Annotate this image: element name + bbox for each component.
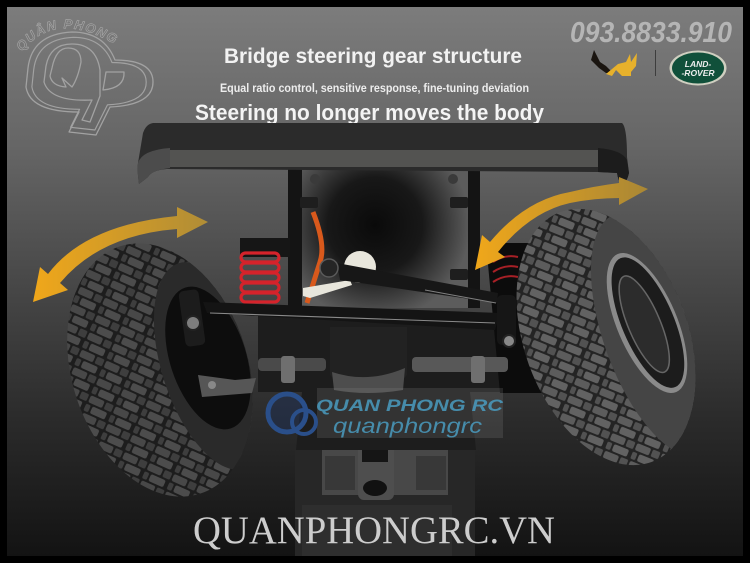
- white servo horn: [303, 251, 376, 298]
- right tire: [516, 209, 696, 466]
- watermark: Quan Phong RC: [268, 388, 504, 438]
- divider between brand logos: [655, 50, 656, 76]
- arrow: right wheel turn: [475, 177, 648, 270]
- icon: Land Rover badge: LAND-: [685, 59, 711, 69]
- icon: Land Rover badge: [670, 50, 726, 86]
- lower mechanical mass: [258, 310, 520, 450]
- red coil spring right: [493, 256, 518, 282]
- chassis plate: [288, 168, 480, 308]
- rear chassis: [295, 430, 475, 556]
- right wheel rim: [590, 242, 704, 404]
- arrow: left wheel turn: [33, 207, 208, 302]
- lower tie rod: [203, 295, 516, 347]
- logo lettering: QUÂN PHONG: [17, 19, 118, 50]
- phone number: 093.8833.910: [570, 17, 732, 49]
- footer: website: QUANPHONGRC.VN: [193, 509, 555, 552]
- icon: yellow bull logo: [591, 50, 637, 76]
- subheading: equal ratio control: Equal ratio control, sensitive response, fine-tuning deviation: [220, 83, 529, 95]
- icon: Land Rover badge: -ROVER: [681, 68, 715, 78]
- logo: QP watermark: [17, 19, 154, 136]
- heading: Bridge steering gear structure: Bridge steering gear structure: [224, 45, 522, 68]
- left tire: [67, 244, 253, 496]
- watermark: Quan Phong RC: quanphongrc: [333, 415, 483, 438]
- watermark: Quan Phong RC: QUAN PHONG RC: [316, 396, 504, 415]
- heading: Steering no longer moves the body: Steering no longer moves the body: [195, 100, 545, 125]
- orange servo wire: [307, 212, 322, 303]
- red coil spring left: [240, 238, 290, 302]
- axle and differential: [258, 327, 508, 393]
- left wheel hub: [149, 276, 267, 440]
- right suspension shadow: [486, 243, 548, 393]
- spoiler bar: [138, 123, 629, 186]
- upper steering link: [320, 259, 498, 303]
